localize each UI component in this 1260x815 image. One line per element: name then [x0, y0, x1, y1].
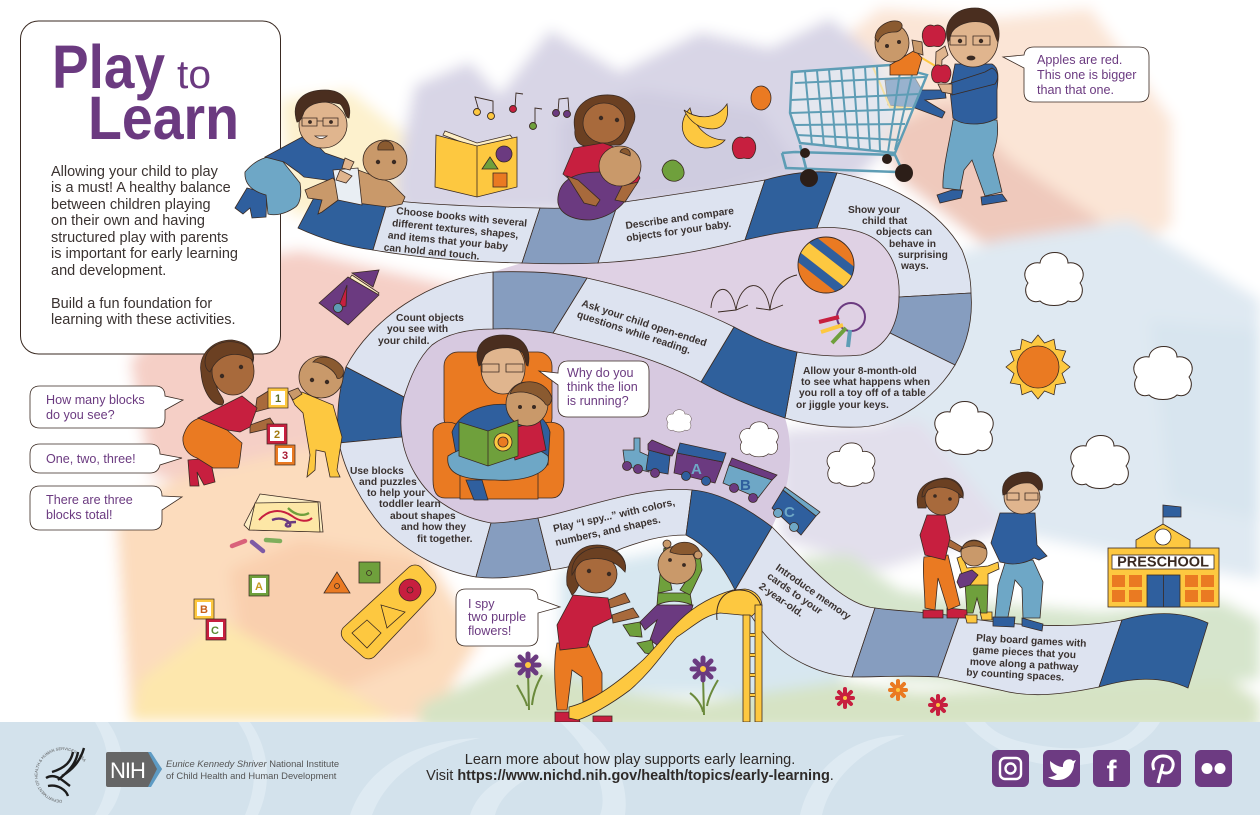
illustration: family walking — [917, 472, 1047, 631]
text: allow your 8-month-old: Allow your 8-month-old — [803, 366, 917, 377]
engine — [622, 438, 675, 478]
text: show your child: surprising — [898, 250, 948, 261]
speech bubble: apples: Apples are red. — [1037, 53, 1122, 67]
text: board games: by counting spaces. — [966, 668, 1065, 684]
speech bubble: one two three: One, two, three! — [46, 452, 136, 466]
speech bubble: I spy: flowers! — [468, 624, 511, 638]
NICHD name: Eunice Kennedy Shriver — [166, 758, 267, 769]
text: memory cards: 2-year-old. — [756, 581, 805, 620]
text: choose books: Choose books with several — [396, 206, 528, 230]
car B: B — [740, 477, 751, 494]
text: ask open-ended questions: questions while reading. — [575, 309, 692, 357]
text: choose books: different textures, shapes, — [392, 218, 519, 241]
illustration: toy train — [622, 438, 820, 535]
NICHD name: of Child Health and Human Development — [166, 770, 337, 781]
speech bubble: three blocks total — [30, 486, 182, 530]
illustration: small red flower right — [930, 696, 946, 714]
game board pathway — [298, 172, 1208, 695]
space 2 — [373, 200, 540, 263]
sign text: PRESCHOOL — [1117, 554, 1209, 570]
speech bubble: I spy: two purple — [468, 610, 526, 624]
block C — [206, 619, 226, 640]
text: I spy game: Play “I spy...” with colors, — [552, 497, 676, 535]
social icon: facebook: f — [1106, 755, 1118, 788]
dad — [991, 472, 1047, 631]
text: choose books: and items that your baby — [387, 230, 509, 253]
illustration: dad and baby reading in armchair — [433, 335, 564, 500]
speech bubble: lion: Why do you — [567, 366, 634, 380]
illustration: toddler in yellow — [288, 356, 343, 477]
block C: C — [211, 625, 219, 637]
title card — [20, 21, 280, 354]
text: show your child: Show your — [848, 205, 900, 216]
text: use blocks: fit together. — [417, 534, 473, 545]
icon: yellow book — [435, 131, 517, 197]
icon: bounce arcs — [711, 275, 797, 312]
text: board games: Play board games with — [976, 633, 1087, 650]
space 7 — [890, 293, 971, 365]
shape: orange triangle — [324, 572, 350, 593]
text: board games: move along a pathway — [970, 657, 1079, 673]
illustration: child on slide — [623, 540, 702, 655]
text: show your child: objects can — [876, 227, 932, 238]
icon: green pear — [662, 160, 684, 181]
text: use blocks: and puzzles — [359, 477, 417, 488]
icon: crayons — [232, 540, 280, 551]
space 18 — [735, 527, 875, 677]
space 10 — [553, 278, 734, 382]
speech bubble: lion: think the lion — [567, 380, 638, 394]
block A — [249, 575, 269, 596]
space 14 — [339, 437, 491, 577]
text: allow your 8-month-old: to see what happens when — [801, 377, 930, 388]
text: count objects: you see with — [387, 324, 448, 335]
illustration: mom holding baby — [558, 95, 641, 220]
icon: banana — [682, 104, 728, 148]
space 9 — [701, 327, 797, 418]
space 20 — [938, 617, 1122, 695]
text: choose books: can hold and touch. — [383, 243, 480, 263]
icon: cart wheels — [800, 148, 913, 187]
NIH logo — [106, 752, 162, 787]
speech bubble: lion — [539, 361, 649, 417]
intro paragraph: structured play with parents — [51, 230, 228, 246]
speech bubble: how many blocks: do you see? — [46, 408, 115, 422]
illustration: dad with apple — [935, 8, 1007, 205]
space 15 — [476, 518, 551, 578]
text: use blocks: and how they — [401, 522, 466, 533]
text: show your child: ways. — [900, 261, 929, 272]
text: show your child: behave in — [889, 239, 936, 250]
block 2: 2 — [274, 429, 280, 441]
text: show your child: child that — [862, 216, 908, 227]
illustration: small orange flower — [890, 681, 906, 699]
speech bubble: one two three — [30, 444, 182, 473]
icon: apple in hand — [932, 65, 951, 83]
space 17 — [686, 490, 772, 590]
speech bubble: how many blocks — [30, 386, 183, 428]
footer message: Visit https://www.nichd.nih.gov/health/topics/early-learning. — [426, 768, 834, 784]
space 13 — [338, 367, 404, 443]
lavender pocket lower — [401, 329, 790, 527]
intro paragraph: Build a fun foundation for — [51, 296, 212, 312]
NIH logo: NIH — [110, 758, 145, 783]
car A: A — [691, 461, 702, 478]
heading: Play to Learn: Play — [52, 33, 165, 101]
icon: music notes — [474, 93, 570, 130]
footer band — [0, 722, 1260, 815]
illustration: mom at slide — [555, 545, 639, 722]
illustration: baby legs behind cart — [873, 58, 946, 118]
illustration: mom kneeling with blocks — [183, 340, 276, 486]
illustration: purple flower left — [517, 654, 542, 710]
illustration: small red flower — [837, 689, 853, 707]
block B: B — [200, 604, 208, 616]
heading: Play to Learn: to — [177, 53, 211, 97]
blocks 1 2 3 — [267, 388, 295, 465]
speech bubble: apples: than that one. — [1037, 83, 1114, 97]
intro paragraph: Allowing your child to play — [51, 164, 219, 180]
social icon: flickr — [1195, 750, 1232, 787]
space 6 — [817, 173, 971, 297]
intro paragraph: on their own and having — [51, 213, 205, 229]
car C — [772, 487, 820, 535]
icon: sun — [1006, 335, 1070, 399]
space 4 — [598, 180, 765, 263]
social icon: facebook — [1093, 750, 1130, 788]
block B — [194, 599, 214, 619]
speech bubble: I spy — [456, 589, 560, 646]
space 5 — [745, 172, 837, 240]
intro paragraph: between children playing — [51, 197, 211, 213]
text: use blocks: to help your — [367, 488, 425, 499]
illustration: preschool building — [1108, 505, 1219, 607]
heading: Play to Learn: Learn — [88, 84, 239, 152]
shape: green square — [359, 562, 380, 583]
icon: striped ball — [798, 236, 854, 294]
icon: toy keys — [819, 303, 865, 347]
text: allow your 8-month-old: or jiggle your keys. — [796, 400, 889, 411]
intro paragraph: learning with these activities. — [51, 312, 236, 328]
icon: shape sorter toy — [341, 565, 436, 659]
footer message: Learn more about how play supports early learning. — [465, 752, 795, 768]
text: describe and compare: objects for your baby. — [626, 219, 732, 244]
text: ask open-ended questions: Ask your child open-ended — [580, 298, 708, 349]
space 1 — [298, 190, 388, 250]
social icon: pinterest — [1144, 750, 1181, 787]
clouds — [667, 252, 1192, 488]
text: I spy game: numbers, and shapes. — [554, 515, 662, 549]
space 19 — [852, 608, 959, 677]
block 1: 1 — [275, 393, 281, 405]
speech bubble: three blocks total: There are three — [46, 493, 133, 507]
text: count objects: Count objects — [396, 313, 464, 324]
text: count objects: your child. — [378, 336, 430, 347]
text: describe and compare: Describe and compare — [625, 206, 735, 232]
block A: A — [255, 581, 263, 593]
space 12 — [346, 272, 493, 397]
speech bubble: apples: This one is bigger — [1037, 68, 1136, 82]
illustration: slide — [569, 589, 762, 722]
icon: purple rocket book — [319, 270, 379, 325]
text: memory cards: Introduce memory — [773, 562, 853, 623]
illustration: shopping cart — [782, 65, 927, 176]
HHS seal: DEPARTMENT OF HEALTH & HUMAN SERVICES • USA — [34, 747, 86, 803]
space 8 — [785, 333, 955, 427]
social icon: twitter — [1043, 750, 1080, 787]
lavender pocket upper — [493, 228, 899, 356]
car B — [723, 458, 777, 502]
intro paragraph: and development. — [51, 263, 166, 279]
speech bubble: I spy: I spy — [468, 597, 495, 611]
car A — [674, 443, 726, 486]
icon: apple held up — [922, 25, 946, 47]
speech bubble: three blocks total: blocks total! — [46, 508, 112, 522]
block 3: 3 — [282, 450, 288, 462]
speech bubble: lion: is running? — [567, 394, 629, 408]
car C: C — [784, 504, 795, 521]
space 3 — [522, 203, 618, 264]
mom — [917, 478, 967, 618]
illustration: baby on tummy — [305, 140, 407, 214]
intro paragraph: is important for early learning — [51, 246, 238, 262]
illustration: dad crawling — [235, 90, 350, 218]
text: allow your 8-month-old: you roll a toy off of a table — [799, 388, 926, 399]
illustration: baby in cart — [875, 21, 923, 75]
icon: red apple — [732, 137, 756, 159]
speech bubble: how many blocks: How many blocks — [46, 393, 145, 407]
icon: orange — [751, 86, 771, 110]
illustration: purple flower right — [690, 658, 718, 715]
text: use blocks: toddler learn — [379, 499, 441, 510]
speech bubble: apples — [1003, 47, 1149, 102]
space 16 — [538, 489, 692, 570]
social icon: instagram — [992, 750, 1029, 787]
NICHD name: National Institute — [267, 758, 339, 769]
text: use blocks: Use blocks — [350, 466, 404, 477]
text: use blocks: about shapes — [390, 511, 456, 522]
space 11 — [493, 272, 587, 333]
text: memory cards: cards to your — [765, 571, 824, 617]
toddler — [957, 540, 999, 623]
intro paragraph: is a must! A healthy balance — [51, 180, 231, 196]
space 21 — [1099, 614, 1208, 688]
text: board games: game pieces that you — [972, 645, 1076, 661]
icon: drawing cards — [244, 494, 323, 532]
